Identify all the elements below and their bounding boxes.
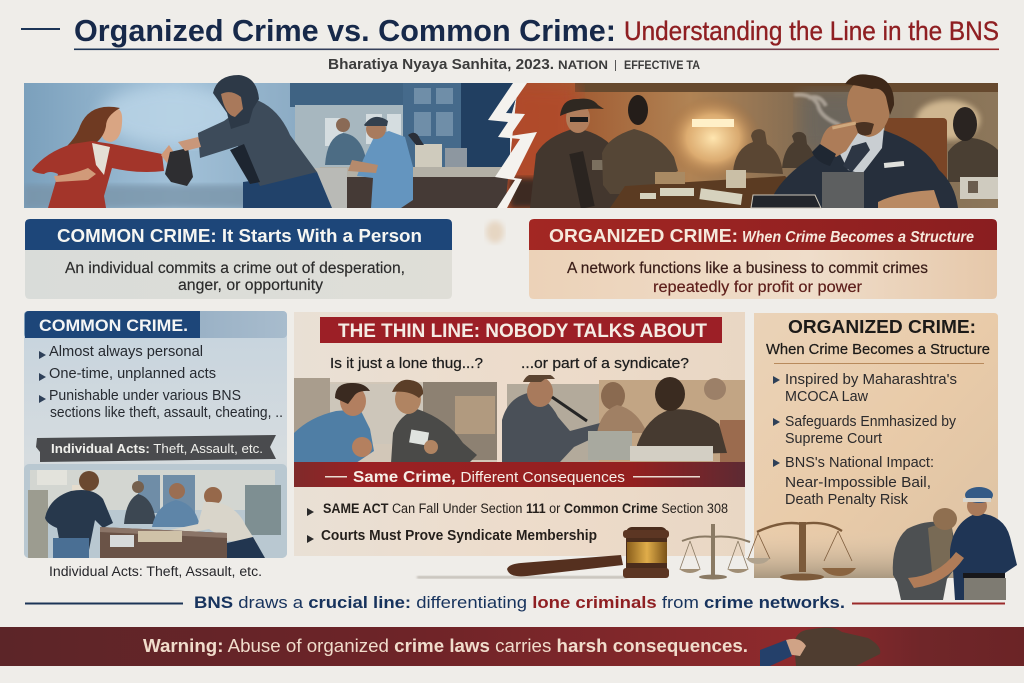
title rule (74, 48, 999, 50)
subheading: Bharatiya Nyaya Sanhita, 2023. (328, 57, 554, 73)
organized summary subheading: When Crime Becomes a Structure (742, 229, 974, 246)
icon: scales of justice, large (746, 522, 856, 580)
organized summary header (529, 219, 997, 250)
man in light shirt (204, 487, 222, 503)
hero: man in suit (751, 74, 958, 208)
hero: hooded thief (178, 75, 332, 208)
right panel heading: When Crime Becomes a Structure (766, 342, 990, 358)
hero: victim woman (32, 107, 193, 208)
teller (169, 483, 185, 499)
left panel background (24, 311, 287, 558)
center panel illustration: two scenes (294, 373, 745, 463)
hero: common crime street scene (24, 83, 526, 208)
title accent dash (21, 28, 60, 30)
shadowy masked figure (601, 382, 625, 410)
right panel bullets: Safeguards Enmhasized by (785, 414, 957, 430)
illustration: officer arresting suspect (893, 487, 1017, 600)
common summary heading: COMMON CRIME: It Starts With a Person (57, 225, 422, 246)
organized summary text: A network functions like a business to commit crimes (567, 260, 928, 277)
hero: organized crime back room (500, 83, 1000, 209)
man in dark jacket (79, 471, 99, 491)
chair (885, 118, 947, 178)
man in gray jacket (391, 409, 477, 463)
icon: gavel (417, 527, 669, 578)
center panel bullet: courts: Courts Must Prove Syndicate Membership (321, 528, 597, 544)
teller figure (336, 118, 350, 132)
back figures (733, 129, 783, 174)
left panel bullets: One-time, unplanned acts (49, 366, 216, 382)
table with cash (610, 176, 786, 208)
armed officer (530, 128, 627, 208)
right panel heading: ORGANIZED CRIME: (788, 317, 976, 337)
icon: scales of justice, small (679, 524, 750, 580)
warning text: Warning: Abuse of organized crime laws carries harsh consequences. (143, 636, 748, 656)
organized summary heading: ORGANIZED CRIME: (549, 225, 738, 246)
right panel bullets: Near-Impossible Bail, (785, 475, 931, 491)
left panel bullets: Punishable under various BNS (49, 388, 241, 404)
common summary text: anger, or opportunity (178, 277, 323, 294)
left panel illustration: bank counter (24, 464, 287, 558)
customer in blue shirt (357, 131, 413, 208)
panel: common crime summary (25, 219, 452, 299)
organized summary body (529, 248, 997, 299)
man in blue shirt (294, 409, 374, 463)
guard (132, 481, 144, 493)
police officer (908, 487, 1017, 600)
cash machine (588, 431, 632, 460)
common summary header (25, 219, 452, 250)
right panel bullets: BNS's National Impact: (785, 455, 934, 471)
smoke (794, 95, 840, 125)
center panel background (294, 312, 745, 556)
arrested suspect (893, 508, 957, 600)
right panel bullets: Supreme Court (785, 431, 882, 447)
common summary text (65, 260, 405, 294)
back figure (704, 378, 726, 400)
lightning crack (488, 83, 537, 208)
right panel background (754, 313, 998, 578)
left panel heading: COMMON CRIME. (39, 317, 188, 335)
left panel bullets: sections like theft, assault, cheating, .. (50, 405, 283, 421)
left panel bullets (39, 344, 283, 421)
subheading: NATION (558, 60, 608, 72)
left panel bullets: Almost always personal (49, 344, 203, 360)
common summary text: An individual commits a crime out of desperation, (65, 260, 405, 277)
masked man right (948, 138, 998, 182)
center panel red band: Same Crime, Different Consequences (353, 469, 625, 486)
left panel caption: Individual Acts: Theft, Assault, etc. (49, 564, 262, 579)
common summary body (25, 248, 452, 299)
right panel bullets: MCOCA Law (785, 389, 869, 405)
title block (21, 13, 999, 50)
right panel bullets: Inspired by Maharashtra's (785, 372, 957, 388)
center panel bullet: same act: SAME ACT Can Fall Under Section 111 or Common Crime Section 308 (323, 501, 728, 516)
organized summary text (567, 260, 928, 296)
title: main: Organized Crime vs. Common Crime: (74, 13, 616, 48)
left panel sash: Individual Acts: Theft, Assault, etc. (51, 441, 263, 456)
right panel bullets (773, 372, 957, 508)
footer statement: BNS draws a crucial line: differentiating lone criminals from crime networks. (194, 593, 845, 612)
left panel sash (36, 435, 276, 462)
warning band (0, 627, 1024, 666)
right panel bullets: Death Penalty Risk (785, 492, 909, 508)
panel: common crime details (24, 311, 287, 579)
panel: organized crime summary (529, 219, 997, 299)
organized summary text: repeatedly for profit or power (653, 279, 862, 296)
center panel questions (330, 355, 689, 372)
subheading (328, 57, 700, 73)
masked man (602, 129, 678, 194)
center panel questions: ...or part of a syndicate? (521, 355, 689, 372)
masked man in coat (637, 409, 727, 455)
panel: the thin line (294, 312, 745, 556)
center panel red band (294, 462, 745, 487)
center panel heading: THE THIN LINE: NOBODY TALKS ABOUT (338, 320, 707, 342)
counter (100, 527, 227, 558)
left panel header strip (24, 311, 287, 338)
hero illustration (24, 74, 1000, 209)
center panel questions: Is it just a lone thug...? (330, 355, 483, 372)
right panel heading (766, 317, 990, 364)
man with microphone (502, 393, 604, 462)
fallen figure (760, 628, 880, 666)
subheading: EFFECTIVE TA (624, 60, 700, 72)
panel: organized crime details (754, 313, 998, 578)
left panel heading (25, 311, 200, 338)
